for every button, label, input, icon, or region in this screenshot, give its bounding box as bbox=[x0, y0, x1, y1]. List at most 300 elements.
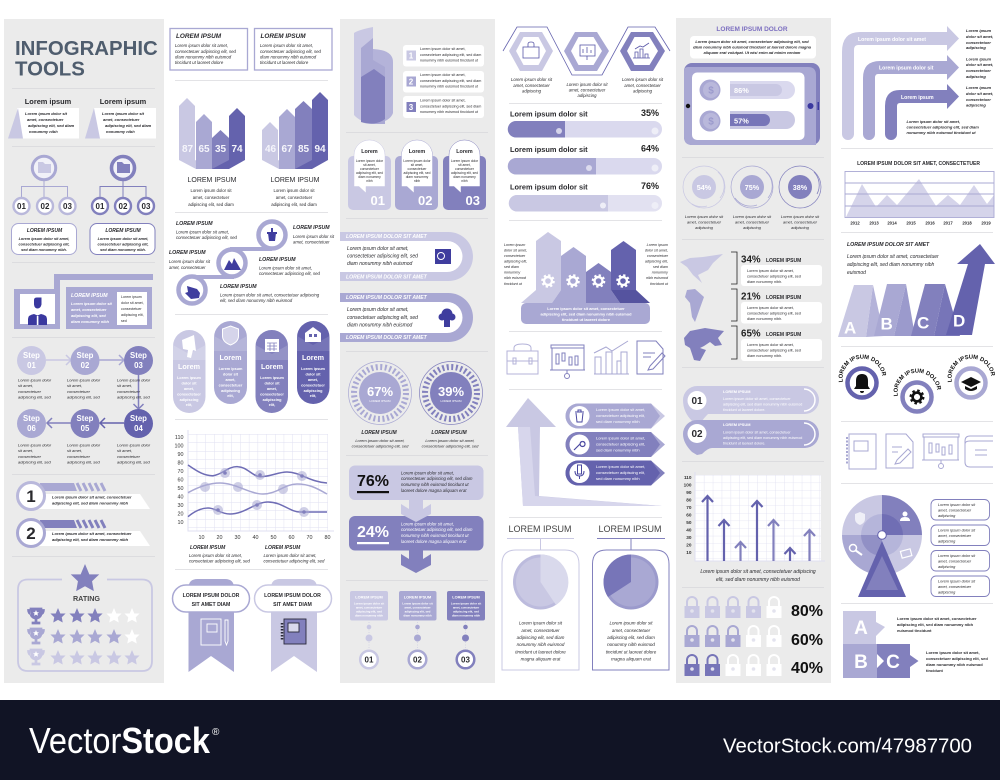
list cards: consectetuer adipiscing elit, sed diam bbox=[420, 79, 481, 83]
zigzag ABCD arrow: adipiscing elit, sed diam nonummy nibh bbox=[847, 262, 934, 268]
speech cards: consectetuer bbox=[455, 167, 475, 171]
pie card: right: LOREM IPSUM bbox=[598, 524, 662, 534]
icon: graduation cap bbox=[961, 377, 981, 391]
step flow: adipiscing elit, sed bbox=[67, 460, 100, 464]
text boxes: top: LOREM IPSUM bbox=[176, 33, 222, 40]
capsule cards: consectetuer bbox=[301, 384, 325, 388]
pie card: right: amet, consectetuer bbox=[612, 628, 651, 633]
chevron list: consectetuer adipiscing elit, bbox=[596, 470, 645, 475]
percent panels with arrows: laoreet dolore magna aliquam erat bbox=[401, 488, 467, 493]
pin banners: tincidunt ut laoreet dolore. bbox=[723, 408, 765, 412]
wheel text cards: amet, consectetuer bbox=[938, 558, 972, 564]
winding path timeline: consectetuer adipiscing elit, sed bbox=[176, 235, 238, 240]
panel: person profile: dolor sit amet, bbox=[121, 301, 144, 305]
bar chart: arrows right: 94 bbox=[314, 144, 326, 155]
speech cards: sit amet, bbox=[363, 163, 376, 167]
capsule cards: dolor sit bbox=[306, 372, 321, 376]
icon: mountain bbox=[224, 258, 241, 270]
text box: right: LOREM IPSUM bbox=[105, 228, 141, 234]
lock rows: 40% bbox=[791, 660, 823, 677]
step flow: Step bbox=[130, 351, 147, 360]
icon: cake bbox=[267, 228, 277, 241]
ABC tags: euismod tincidunt bbox=[897, 628, 932, 633]
step flow: consectetuer bbox=[18, 389, 42, 394]
text boxes: top: consectetuer adipiscing elit, sed bbox=[175, 49, 237, 54]
area chart: LOREM IPSUM DOLOR SIT AMET, CONSECTETUER bbox=[857, 161, 980, 167]
arrow bars with gears: nibh euismod bbox=[504, 276, 527, 280]
step flow: Step bbox=[77, 351, 94, 360]
arrow bar chart: 50 bbox=[686, 520, 692, 525]
list cards: 3 bbox=[409, 103, 414, 112]
map stats: consectetuer adipiscing elit, sed bbox=[747, 348, 801, 352]
pin banners: 02 bbox=[691, 429, 703, 440]
map stats: consectetuer adipiscing elit, sed bbox=[747, 274, 801, 278]
L-shaped arrows: Lorem ipsum bbox=[966, 85, 992, 90]
icon: notebook dark bbox=[282, 619, 306, 644]
arrow bars with gears: nonummy bbox=[652, 270, 669, 274]
line chart: 20 bbox=[216, 535, 222, 541]
map stats: diam nonummy nibh. bbox=[747, 317, 782, 321]
list cards: nonummy nibh euismod tincidunt ut bbox=[420, 110, 478, 114]
bar chart: arrows left: 87 bbox=[182, 144, 193, 155]
numbered mini cards: amet, consectetuer bbox=[453, 606, 480, 610]
ribbon: right notebook: LOREM IPSUM DOLOR bbox=[264, 593, 321, 599]
chevron list: consectetuer adipiscing elit, bbox=[596, 442, 645, 446]
icon: magnifier bbox=[855, 550, 862, 555]
footer: brand bar: ® bbox=[212, 727, 220, 738]
footer: brand bar bbox=[0, 700, 1000, 780]
radial gauge 67%: LOREM IPSUM bbox=[369, 399, 391, 403]
zigzag ABCD arrow: D bbox=[953, 312, 965, 330]
zigzag ABCD arrow: euismod bbox=[847, 270, 866, 276]
radial gauge 67% bbox=[348, 362, 412, 424]
pin banners: LOREM IPSUM bbox=[723, 422, 750, 427]
zigzag ABCD arrow bbox=[838, 242, 995, 338]
text boxes: top: consectetuer adipiscing elit, sed bbox=[260, 49, 322, 54]
big arrow bbox=[506, 398, 662, 506]
pie card: left: Lorem ipsum dolor sit bbox=[519, 620, 563, 626]
panel: person profile bbox=[14, 274, 153, 329]
step flow: consectetuer bbox=[67, 454, 91, 459]
capsule cards: dolor sit bbox=[223, 372, 239, 376]
org chart: left: 02 bbox=[41, 202, 50, 211]
bar chart: arrows left: 65 bbox=[198, 144, 210, 155]
panel: lorem ipsum triangle labels: amet, consectetuer bbox=[27, 117, 64, 122]
L-shaped arrows: Lorem ipsum dolor sit amet, bbox=[906, 119, 960, 124]
ABC tags: Lorem ipsum dolor sit amet, consectetuer bbox=[897, 616, 977, 621]
panel: lorem ipsum triangle labels: adipiscing elit, sed diam bbox=[105, 123, 152, 128]
ring charts bbox=[683, 166, 821, 230]
gauge captions: consectetuer adipiscing elit, sed bbox=[352, 444, 409, 448]
winding path timeline: LOREM IPSUM bbox=[259, 257, 296, 263]
panel: lorem ipsum triangle labels bbox=[8, 97, 156, 138]
panel: lorem ipsum triangle labels: nonummy nibh bbox=[106, 129, 135, 134]
speech cards: Lorem bbox=[409, 149, 425, 155]
chart captions: Lorem ipsum dolor sit bbox=[273, 188, 315, 193]
arrow bars with gears: sed diam bbox=[653, 265, 668, 269]
step flow: Step bbox=[130, 414, 147, 423]
step flow: Lorem ipsum dolor bbox=[18, 378, 52, 382]
line chart captions: LOREM IPSUM bbox=[265, 545, 301, 551]
line chart: 30 bbox=[178, 503, 184, 509]
L-shaped arrows: Lorem ipsum dolor sit amet bbox=[858, 37, 926, 43]
progress bars bbox=[508, 108, 662, 212]
line chart: 50 bbox=[178, 486, 184, 492]
U banners: consectetuer adipiscing elit, sed bbox=[347, 315, 418, 321]
capsule cards: elit, bbox=[310, 394, 316, 398]
ABC tags: C bbox=[886, 652, 900, 673]
text box: right bbox=[90, 224, 155, 254]
circular badges: LOREM IPSUM DOLOR bbox=[894, 368, 942, 396]
speech cards: consectetuer bbox=[360, 167, 380, 171]
icon: person bbox=[28, 298, 47, 325]
chart captions: LOREM IPSUM bbox=[270, 177, 320, 184]
icon: calendar bbox=[265, 339, 279, 352]
heading: lorem ipsum dolor: Lorem ipsum dolor sit amet, consectetuer adipiscing elit, sed bbox=[695, 39, 809, 44]
text box: left: consectetuer adipiscing elit, bbox=[18, 242, 70, 246]
arrow bar chart: 90 bbox=[686, 490, 692, 495]
step flow: sit amet, bbox=[18, 448, 33, 453]
step flow: sit amet, bbox=[67, 383, 82, 388]
step flow: sit amet, bbox=[117, 448, 132, 453]
percent panels with arrows: Lorem ipsum dolor sit amet, bbox=[401, 522, 454, 526]
line chart: 40 bbox=[252, 535, 258, 541]
circular badges bbox=[838, 354, 995, 414]
step flow: 04 bbox=[134, 424, 143, 433]
icon: house bbox=[305, 327, 321, 342]
numbered banner 2: adipiscing elit, sed diam nonummy nibh bbox=[52, 537, 129, 542]
step flow: sit amet, bbox=[67, 448, 82, 453]
ABC tags: Lorem ipsum dolor sit amet, bbox=[926, 650, 980, 655]
map: south america bbox=[685, 289, 704, 322]
map stats: LOREM IPSUM bbox=[766, 332, 801, 338]
percent panels with arrows: laoreet dolore magna aliquam erat bbox=[401, 539, 467, 544]
numbered mini cards: diam nonummy nibh bbox=[355, 614, 383, 618]
capsule cards: consectetuer bbox=[260, 392, 284, 396]
pie card: left: amet, consectetuer bbox=[521, 628, 560, 633]
ribbon: right notebook bbox=[254, 579, 332, 672]
step flow: 01 bbox=[27, 361, 36, 370]
circular badges: LOREM IPSUM DOLOR bbox=[838, 354, 886, 382]
winding path timeline: LOREM IPSUM bbox=[220, 284, 257, 290]
ABC tags bbox=[843, 611, 988, 678]
numbered banner 1: Lorem ipsum dolor sit amet, consectetuer bbox=[52, 494, 132, 500]
line chart: 20 bbox=[178, 512, 184, 518]
panel: person profile: diam nonummy nibh bbox=[71, 319, 110, 324]
arrow bar chart: 100 bbox=[684, 482, 692, 488]
text boxes: top: diam nonummy nibh euismod bbox=[260, 54, 317, 60]
icon: board small bbox=[580, 45, 595, 60]
ABC tags: B bbox=[854, 652, 868, 673]
line chart: 90 bbox=[178, 452, 184, 458]
step flow: adipiscing elit, sed bbox=[67, 394, 100, 400]
pie card: left: nonummy nibh euismod bbox=[517, 642, 565, 647]
numbered banner 2 bbox=[18, 520, 150, 546]
area chart: 2019 bbox=[981, 220, 991, 226]
capsule cards: Lorem bbox=[220, 353, 241, 362]
capsule cards: amet, bbox=[226, 378, 235, 382]
U banners bbox=[340, 232, 473, 342]
arrow bars with gears: tincidunt ut bbox=[504, 282, 523, 286]
line chart captions: LOREM IPSUM bbox=[190, 545, 226, 551]
winding path timeline: Lorem ipsum dolor sit amet, consectetuer adipiscing bbox=[220, 292, 320, 298]
capsule cards: consectetuer bbox=[219, 384, 243, 388]
lock rows bbox=[684, 597, 823, 677]
list cards: nonummy nibh euismod tincidunt ut bbox=[420, 84, 478, 88]
map: eurasia and africa bbox=[684, 328, 724, 361]
icon: key bbox=[574, 442, 585, 450]
arrow bar chart: elit, sed diam nonummy nibh euismod bbox=[716, 577, 800, 583]
text boxes: top bbox=[170, 28, 332, 70]
ABC tags: adipiscing elit, sed diam nonummy nibh bbox=[897, 622, 974, 627]
icon: shield check bbox=[855, 512, 865, 525]
capsule cards: Lorem ipsum bbox=[219, 367, 243, 371]
step flow: adipiscing elit, sed bbox=[18, 394, 51, 400]
icon row: line icons bbox=[507, 341, 665, 378]
pin banners: Lorem ipsum dolor sit amet, consectetuer bbox=[723, 397, 791, 401]
gauge captions: LOREM IPSUM bbox=[361, 430, 397, 436]
icon: growth chart bbox=[594, 341, 629, 374]
L-shaped arrows: Lorem ipsum bbox=[966, 56, 992, 62]
arrow bars with gears: nonummy bbox=[504, 270, 521, 274]
3D cylinder chart bbox=[354, 27, 393, 124]
line chart: 10 bbox=[178, 520, 184, 526]
ring charts: amet, consectetuer bbox=[687, 220, 722, 224]
line chart: 70 bbox=[306, 535, 312, 541]
capsule cards: Lorem ipsum bbox=[260, 376, 285, 380]
percent panels with arrows bbox=[349, 466, 484, 573]
panel: lorem ipsum triangle labels: Lorem ipsum bbox=[25, 97, 72, 106]
line chart: 40 bbox=[178, 494, 184, 500]
percent panels with arrows: consectetuer adipiscing elit, sed diam bbox=[401, 476, 473, 481]
wheel text cards: Lorem ipsum dolor sit bbox=[938, 528, 976, 532]
icon: speaker person bbox=[900, 512, 910, 521]
arrow bars with gears: consectetuer bbox=[647, 254, 669, 258]
hexagon icons: Lorem ipsum dolor sit bbox=[566, 82, 608, 87]
arrow bar chart: 80 bbox=[686, 498, 692, 502]
map stats bbox=[680, 252, 822, 361]
speech cards: nibh bbox=[414, 179, 420, 183]
chart captions: LOREM IPSUM bbox=[187, 177, 237, 184]
arrow bar chart: 10 bbox=[686, 550, 692, 555]
tablet with progress bbox=[684, 63, 820, 145]
gauge captions: LOREM IPSUM bbox=[431, 430, 467, 436]
speech cards: Lorem ipsum dolor bbox=[451, 159, 479, 163]
title: TOOLS bbox=[15, 58, 85, 80]
capsule cards: adipiscing bbox=[263, 398, 282, 402]
line chart captions: consectetuer adipiscing elit, sed bbox=[264, 558, 325, 564]
map stats: 21% bbox=[741, 292, 761, 302]
U banners: LOREM IPSUM DOLOR SIT AMET bbox=[346, 335, 428, 341]
winding path timeline: LOREM IPSUM bbox=[169, 250, 206, 256]
ABC tags: A bbox=[854, 618, 868, 639]
chart captions: adipiscing elit, sed diam bbox=[271, 202, 317, 207]
arrow bars with gears: Lorem ipsum bbox=[647, 243, 668, 247]
hexagon icons: amet, consectetuer bbox=[513, 83, 550, 88]
numbered mini cards: adipiscing elit, sed bbox=[453, 610, 479, 614]
line chart: 100 bbox=[174, 444, 184, 450]
speech cards: nibh bbox=[366, 179, 373, 183]
winding path timeline: LOREM IPSUM bbox=[176, 221, 213, 227]
step flow: Step bbox=[77, 414, 94, 423]
panel: person profile: sed bbox=[121, 319, 127, 323]
text box: right: consectetuer adipiscing elit, bbox=[97, 242, 149, 246]
capsule cards: consectetuer bbox=[177, 392, 201, 396]
icon: candlestick board bbox=[922, 434, 959, 468]
area chart: 2012 bbox=[850, 220, 860, 226]
step flow: consectetuer bbox=[67, 389, 91, 394]
radial gauge 39%: LOREM IPSUM bbox=[440, 399, 462, 403]
lock rows: 80% bbox=[791, 603, 823, 620]
wheel text cards: adipiscing bbox=[938, 564, 956, 569]
icon: document and pen bbox=[637, 341, 665, 374]
list cards: 1 bbox=[409, 52, 414, 60]
text boxes: top: diam nonummy nibh euismod bbox=[175, 54, 232, 60]
bar chart: arrows right: 85 bbox=[298, 144, 309, 155]
wheel text cards: amet, consectetuer bbox=[938, 533, 972, 538]
bar chart: arrows right: 46 bbox=[265, 144, 276, 155]
U banners: Lorem ipsum dolor sit amet, bbox=[347, 307, 409, 313]
area chart: 2016 bbox=[925, 220, 935, 226]
chevron list: Lorem ipsum dolor sit amet, bbox=[596, 407, 645, 412]
icon: briefcase bbox=[507, 344, 538, 374]
progress bars: 35% bbox=[641, 108, 659, 118]
numbered mini cards: adipiscing elit, sed bbox=[405, 610, 431, 614]
ABC tags: diam nonummy nibh euismod bbox=[926, 662, 983, 667]
numbered banner 2: Lorem ipsum dolor sit amet, consectetuer bbox=[52, 531, 132, 536]
panel: lorem ipsum triangle labels: Lorem ipsum bbox=[100, 97, 147, 106]
list cards: Lorem ipsum dolor sit amet, bbox=[420, 98, 466, 102]
title bbox=[15, 38, 158, 80]
zigzag ABCD arrow: B bbox=[880, 314, 893, 334]
U banners: Lorem ipsum dolor sit amet, bbox=[347, 246, 409, 252]
pin banners: tincidunt ut laoreet dolore. bbox=[723, 442, 765, 446]
gauge captions bbox=[352, 430, 479, 448]
L-shaped arrows: dolor sit amet, bbox=[966, 34, 993, 39]
panel: lorem ipsum triangle labels: Lorem ipsum dolor sit bbox=[25, 111, 68, 116]
arrow bar chart bbox=[684, 472, 825, 583]
bar chart: arrows left: 74 bbox=[231, 144, 243, 155]
icon: safe bbox=[435, 249, 451, 264]
icon: notebook bbox=[847, 434, 876, 469]
map stats: 65% bbox=[741, 328, 761, 340]
capsule cards: dolor sit bbox=[265, 382, 280, 386]
area chart: 2015 bbox=[906, 220, 916, 226]
icon: presentation board bbox=[550, 345, 585, 378]
pin banners bbox=[683, 386, 819, 455]
numbered banner 1: adipiscing elit, sed diam nonummy nibh bbox=[52, 500, 129, 506]
text boxes: top: tincidunt ut laoreet dolore bbox=[175, 60, 224, 65]
panel: person profile: LOREM IPSUM bbox=[71, 293, 108, 299]
zigzag ABCD arrow: LOREM IPSUM DOLOR SIT AMET bbox=[847, 242, 930, 248]
winding path timeline bbox=[169, 221, 335, 304]
arrow bar chart: 60 bbox=[686, 512, 692, 518]
step flow: consectetuer bbox=[117, 454, 141, 459]
zigzag ABCD arrow: A bbox=[844, 318, 856, 338]
map stats: consectetuer adipiscing elit, sed bbox=[747, 312, 801, 316]
U banners: consectetuer adipiscing elit, sed bbox=[347, 254, 418, 260]
radial gauge 39% bbox=[420, 362, 482, 424]
hexagon icons: adipiscing bbox=[633, 88, 653, 94]
pin banners: adipiscing elit, sed diam nonummy nibh euismod bbox=[723, 436, 802, 440]
pin banners: Lorem ipsum dolor sit amet, consectetuer bbox=[723, 430, 791, 434]
bar chart: arrows left bbox=[179, 98, 245, 169]
step flow: Lorem ipsum dolor bbox=[18, 442, 52, 448]
capsule cards: Lorem bbox=[178, 362, 200, 371]
line chart captions: Lorem ipsum dolor sit amet, bbox=[264, 553, 317, 558]
pin banners: adipiscing elit, sed diam nonummy nibh euismod bbox=[723, 402, 802, 406]
numbered mini cards: LOREM IPSUM bbox=[452, 594, 480, 600]
ring charts: 75% bbox=[745, 183, 760, 192]
map stats: Lorem ipsum dolor sit amet, bbox=[747, 306, 794, 310]
numbered mini cards: 02 bbox=[413, 656, 422, 664]
line chart: 30 bbox=[234, 535, 240, 541]
text box: left: sed diam nonummy nibh. bbox=[21, 248, 67, 252]
text box: left bbox=[12, 224, 76, 254]
pie card: right: Lorem ipsum dolor sit bbox=[609, 620, 653, 626]
list cards: consectetuer adipiscing elit, sed diam bbox=[420, 53, 481, 57]
pin banners: 01 bbox=[691, 396, 703, 407]
numbered mini cards: LOREM IPSUM bbox=[404, 594, 431, 600]
ring charts: Lorem ipsum dolor sit bbox=[685, 214, 724, 219]
title: INFOGRAPHIC bbox=[15, 38, 158, 60]
arrow bars with gears: Lorem ipsum bbox=[504, 243, 525, 247]
text boxes: top: Lorem ipsum dolor sit amet, bbox=[260, 43, 313, 48]
arrow bars with gears: tincidunt ut laoreet dolore bbox=[562, 317, 611, 322]
icon: microphone bbox=[575, 465, 584, 479]
gauge captions: consectetuer adipiscing elit, sed bbox=[422, 444, 479, 448]
wheel text cards: adipiscing bbox=[938, 538, 956, 544]
speech cards: 02 bbox=[418, 193, 432, 208]
ABC tags: tincidunt bbox=[926, 668, 944, 673]
hexagon icons: amet, consectetuer bbox=[569, 88, 606, 92]
wheel text cards: amet, consectetuer bbox=[938, 584, 972, 589]
speech cards: adipiscing elit, sed bbox=[404, 171, 431, 175]
panel: person profile: adipiscing elit, bbox=[121, 313, 144, 317]
bar chart: arrows left: 35 bbox=[215, 144, 226, 155]
pie card: right: adipiscing elit, sed diam bbox=[607, 635, 655, 640]
winding path timeline: Lorem ipsum dolor sit bbox=[169, 259, 211, 264]
arrow bars with gears: tincidunt ut bbox=[650, 282, 669, 286]
icon: signed document bbox=[886, 434, 913, 468]
radial gauge 39%: 39% bbox=[438, 384, 464, 399]
arrow bar chart: 30 bbox=[686, 535, 692, 540]
step flow: 05 bbox=[81, 424, 90, 433]
panel: lorem ipsum triangle labels: Lorem ipsum dolor sit bbox=[102, 111, 145, 116]
arrow bars with gears bbox=[504, 232, 669, 324]
rating panel bbox=[18, 564, 152, 671]
speech cards: sit amet, bbox=[458, 163, 471, 167]
line chart captions bbox=[189, 545, 325, 564]
arrow bars with gears: Lorem ipsum dolor sit amet, consectetuer bbox=[547, 306, 625, 311]
ring charts: amet, consectetuer bbox=[783, 220, 818, 224]
percent panels with arrows: consectetuer adipiscing elit, sed diam bbox=[401, 527, 473, 532]
icon: hand bbox=[185, 286, 200, 299]
line chart: 50 bbox=[270, 535, 276, 541]
org chart: right: 03 bbox=[142, 202, 151, 211]
step flow: Step bbox=[23, 414, 40, 423]
numbered mini cards: Lorem ipsum dolor sit bbox=[451, 602, 481, 606]
area chart: 2014 bbox=[887, 220, 897, 226]
pie card: left: tincidunt ut laoreet dolore bbox=[515, 650, 566, 654]
capsule cards: Lorem bbox=[302, 353, 324, 362]
U banners: LOREM IPSUM DOLOR SIT AMET bbox=[346, 234, 428, 240]
list cards: 2 bbox=[409, 78, 414, 86]
icon: money bbox=[900, 549, 912, 558]
panel: lorem ipsum triangle labels: amet, consectetuer bbox=[103, 117, 140, 122]
org chart: left: 03 bbox=[63, 202, 72, 211]
map stats: LOREM IPSUM bbox=[766, 295, 801, 301]
